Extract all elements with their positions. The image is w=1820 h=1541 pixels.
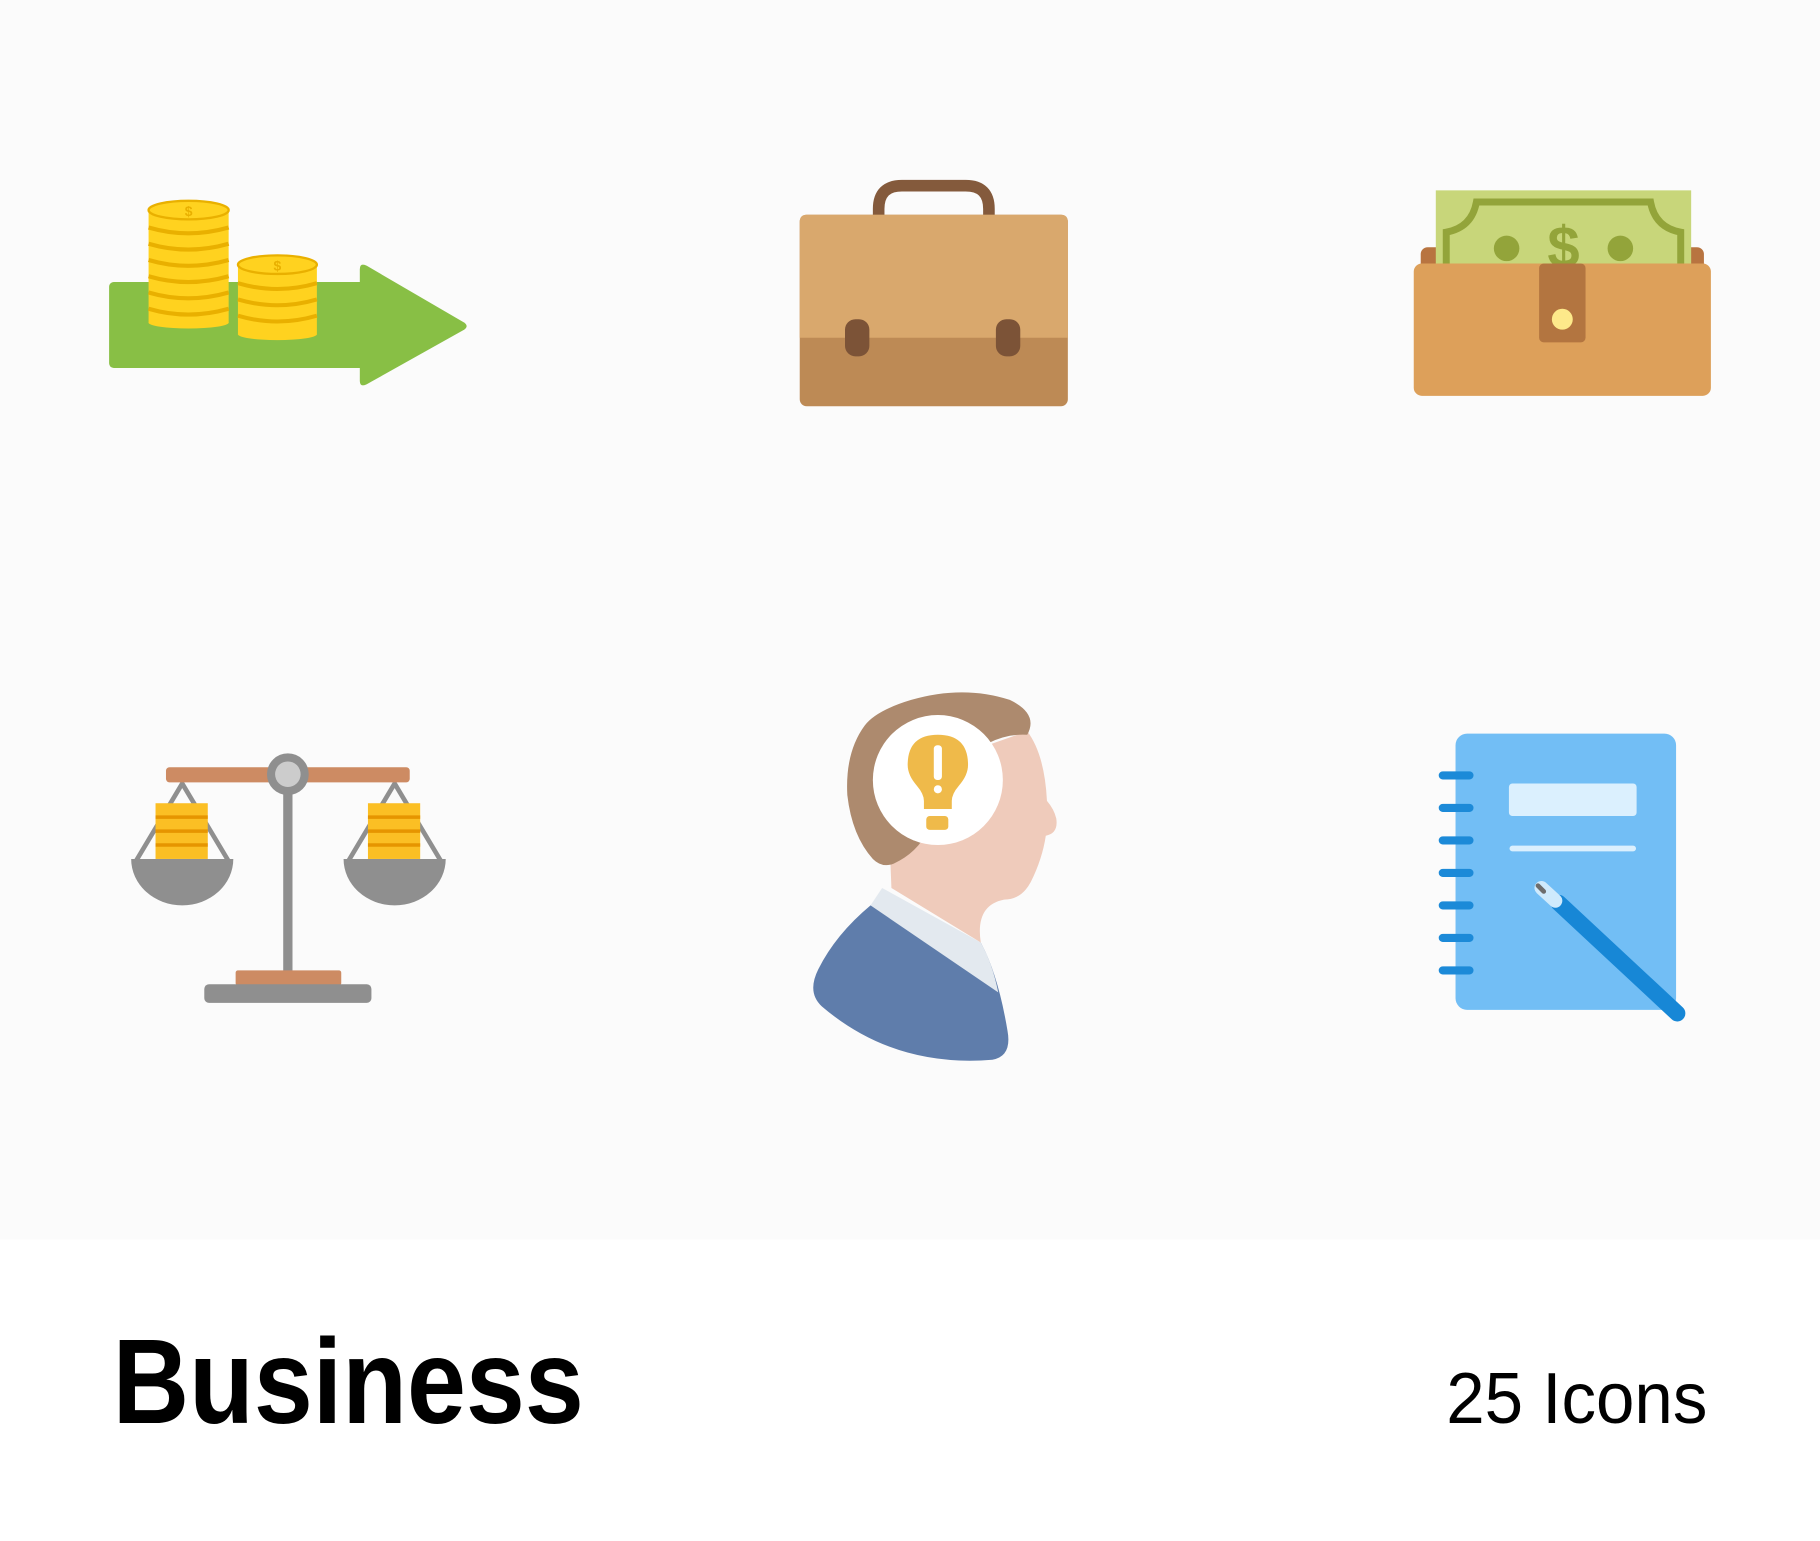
- icon count: 25 Icons: [1446, 1359, 1707, 1439]
- icon: wallet with cash: $: [1547, 215, 1580, 280]
- icon: wallet with cash: [1414, 190, 1711, 396]
- icon: money arrow with coins: [109, 201, 467, 385]
- icon: person with idea: [813, 692, 1057, 1061]
- icon: notebook and pen: [1443, 734, 1677, 1013]
- icon: balance scale: [131, 753, 446, 1003]
- icon: briefcase: [800, 186, 1068, 406]
- icon: money arrow with coins: $: [274, 257, 282, 273]
- title: Business: [113, 1314, 584, 1449]
- icon: money arrow with coins: $: [185, 203, 193, 219]
